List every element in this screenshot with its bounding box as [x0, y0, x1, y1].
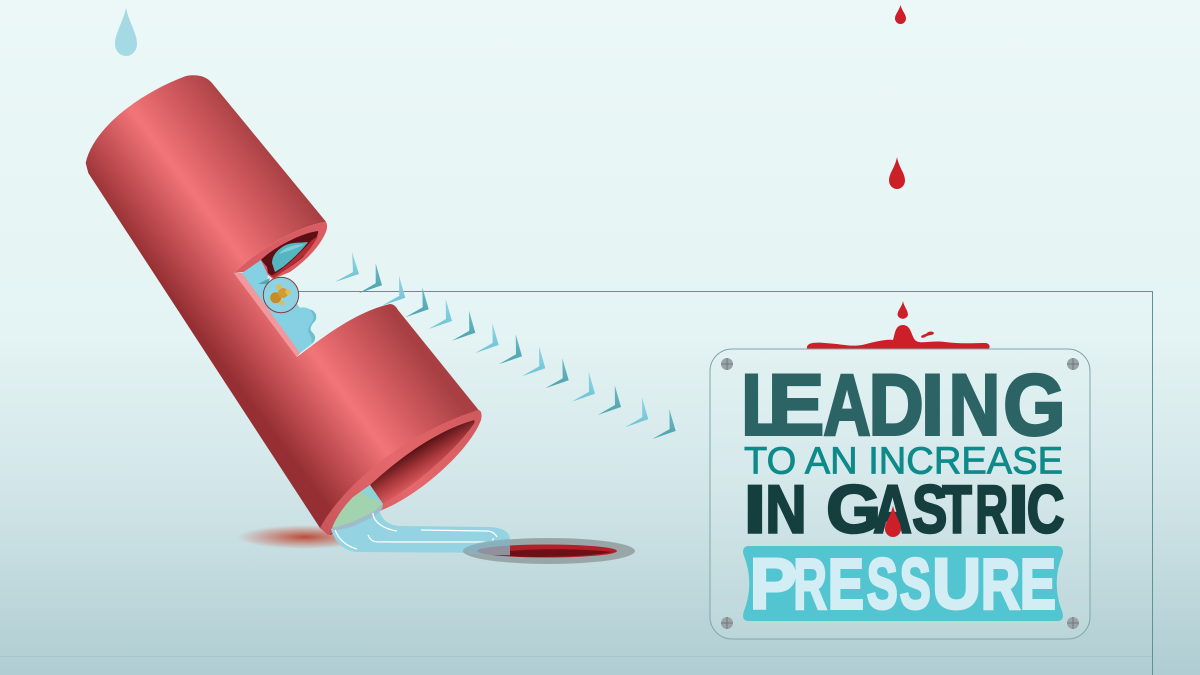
- grey edge under water: [332, 504, 383, 531]
- icon: small red drop: [895, 5, 906, 24]
- heading: in gastric: R: [975, 473, 1008, 548]
- heading: in gastric: I: [1008, 473, 1029, 548]
- tube body: [86, 75, 481, 535]
- heading: to an increase: TO AN INCREASE: [744, 440, 1063, 482]
- chevron arrows: [335, 252, 676, 439]
- lower opening rim: [320, 410, 482, 535]
- heading: leading: D: [869, 358, 924, 454]
- pressure banner: [743, 546, 1063, 621]
- screws: [721, 358, 1079, 629]
- upper cut rim: [234, 222, 327, 279]
- highlights: [335, 513, 497, 549]
- clot inside upper opening: [272, 242, 308, 272]
- pink cut edge: [234, 273, 300, 357]
- heading: in gastric: N: [765, 473, 806, 548]
- heading: leading: E: [768, 358, 824, 454]
- heading: leading: L: [741, 358, 786, 454]
- small teal shape: [258, 278, 270, 284]
- water inside opening: [332, 485, 383, 528]
- heading: pressure: R: [793, 546, 827, 624]
- floor shadow: [237, 525, 373, 549]
- red lip of upper opening: [271, 236, 318, 278]
- dark fluid edge: [308, 310, 316, 343]
- heading: pressure: S: [900, 546, 931, 624]
- icon: blue water drop: [115, 8, 137, 56]
- heading: leading: N: [949, 358, 1000, 454]
- heading: leading: I: [921, 358, 944, 454]
- title panel: [710, 349, 1090, 639]
- blood splash: [807, 301, 990, 349]
- water stream: [331, 485, 510, 553]
- heading: pressure: S: [867, 546, 898, 624]
- heading: in gastric: T: [942, 473, 972, 548]
- heading: in gastric: G: [826, 473, 881, 548]
- heading: pressure: E: [828, 546, 864, 624]
- heading: in gastric: A: [873, 473, 912, 548]
- heading: in gastric: S: [912, 473, 947, 548]
- lower opening: [370, 420, 475, 504]
- heading: pressure: R: [981, 546, 1020, 624]
- red tube: [86, 75, 482, 535]
- magnifier with particles: [263, 277, 299, 313]
- heading: leading: A: [824, 358, 870, 454]
- drain hole: [463, 538, 635, 564]
- icon: red drop: [889, 157, 905, 189]
- heading: leading: G: [1003, 358, 1066, 454]
- heading: pressure: E: [1020, 546, 1056, 624]
- icon: red drop in letter: [885, 506, 901, 537]
- upper opening: [261, 231, 318, 277]
- heading: pressure: P: [750, 546, 797, 624]
- heading: pressure: U: [932, 546, 981, 624]
- heading: in gastric: C: [1027, 473, 1064, 548]
- heading: in gastric: I: [744, 473, 766, 548]
- connector lines: [0, 292, 1152, 675]
- cut interior: [242, 260, 316, 353]
